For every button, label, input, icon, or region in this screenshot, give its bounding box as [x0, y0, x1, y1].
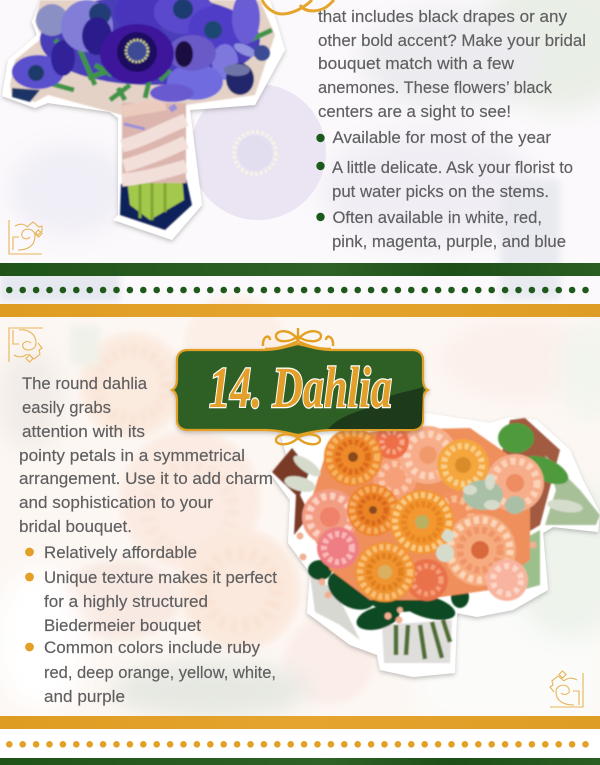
text: dahlia intro: The round dahlia	[22, 375, 148, 393]
ornament: corner dahlia top	[9, 328, 43, 362]
ornament: corner top section	[9, 220, 42, 254]
title banner: 14. Dahlia	[172, 328, 428, 444]
list: dahlia facts: Common colors include ruby	[44, 639, 261, 657]
list: dahlia facts: red, deep orange, yellow, white,	[44, 664, 276, 682]
leaves overlapping banner	[328, 387, 423, 429]
orange divider bar lower	[0, 716, 600, 729]
list: anemone facts: Available for most of the year	[332, 129, 552, 147]
banner title text: 14. Dahlia	[209, 355, 392, 420]
list: dahlia facts: and purple	[44, 688, 125, 706]
orange divider bar	[0, 304, 600, 317]
banner flourish bottom	[276, 434, 320, 444]
text: dahlia intro: easily grabs	[22, 399, 111, 417]
text: anemone intro: that includes black drapes or any	[318, 8, 568, 26]
text: anemone intro: bouquet match with a few	[318, 55, 514, 73]
ornament: corner dahlia bottom	[550, 671, 583, 707]
image: dahlia bouquet	[270, 413, 600, 677]
list: dahlia facts: Relatively affordable	[44, 544, 197, 562]
list: anemone facts: Often available in white, red,	[332, 209, 542, 227]
banner flourish top	[263, 328, 333, 349]
panel: dahlia background	[0, 295, 600, 718]
text: dahlia intro: arrangement. Use it to add charm	[19, 470, 273, 488]
list: dahlia facts: for a highly structured	[44, 593, 208, 611]
list: dahlia facts	[25, 544, 277, 706]
text: anemone intro: anemones. These flowers’ black	[318, 79, 553, 97]
green dotted divider	[6, 287, 589, 293]
green bar at page bottom	[0, 758, 600, 765]
list: anemone facts: A little delicate. Ask your florist to	[332, 159, 573, 177]
text: dahlia intro: pointy petals in a symmetrical	[19, 447, 245, 465]
text: dahlia intro: bridal bouquet.	[19, 518, 132, 536]
orange dotted divider	[6, 741, 589, 748]
ornament: top flourish	[262, 0, 334, 14]
list: anemone facts	[316, 129, 573, 251]
text: dahlia intro: attention with its	[22, 423, 145, 441]
list: dahlia facts: Unique texture makes it perfect	[44, 569, 277, 587]
list: anemone facts: put water picks on the stems.	[332, 183, 549, 201]
text: anemone intro: other bold accent? Make your bridal	[318, 32, 586, 50]
green divider bar	[0, 263, 600, 276]
list: anemone facts: pink, magenta, purple, and blue	[332, 233, 566, 251]
text: dahlia intro: and sophistication to your	[19, 494, 214, 512]
text: anemone intro: centers are a sight to see!	[318, 103, 511, 121]
white band between lower dividers	[0, 729, 600, 758]
list: dahlia facts: Biedermeier bouquet	[44, 617, 201, 635]
text: anemone intro	[318, 8, 586, 121]
image: anemone bouquet	[2, 0, 285, 240]
panel: anemone background	[0, 0, 600, 304]
text: dahlia intro	[19, 375, 273, 536]
